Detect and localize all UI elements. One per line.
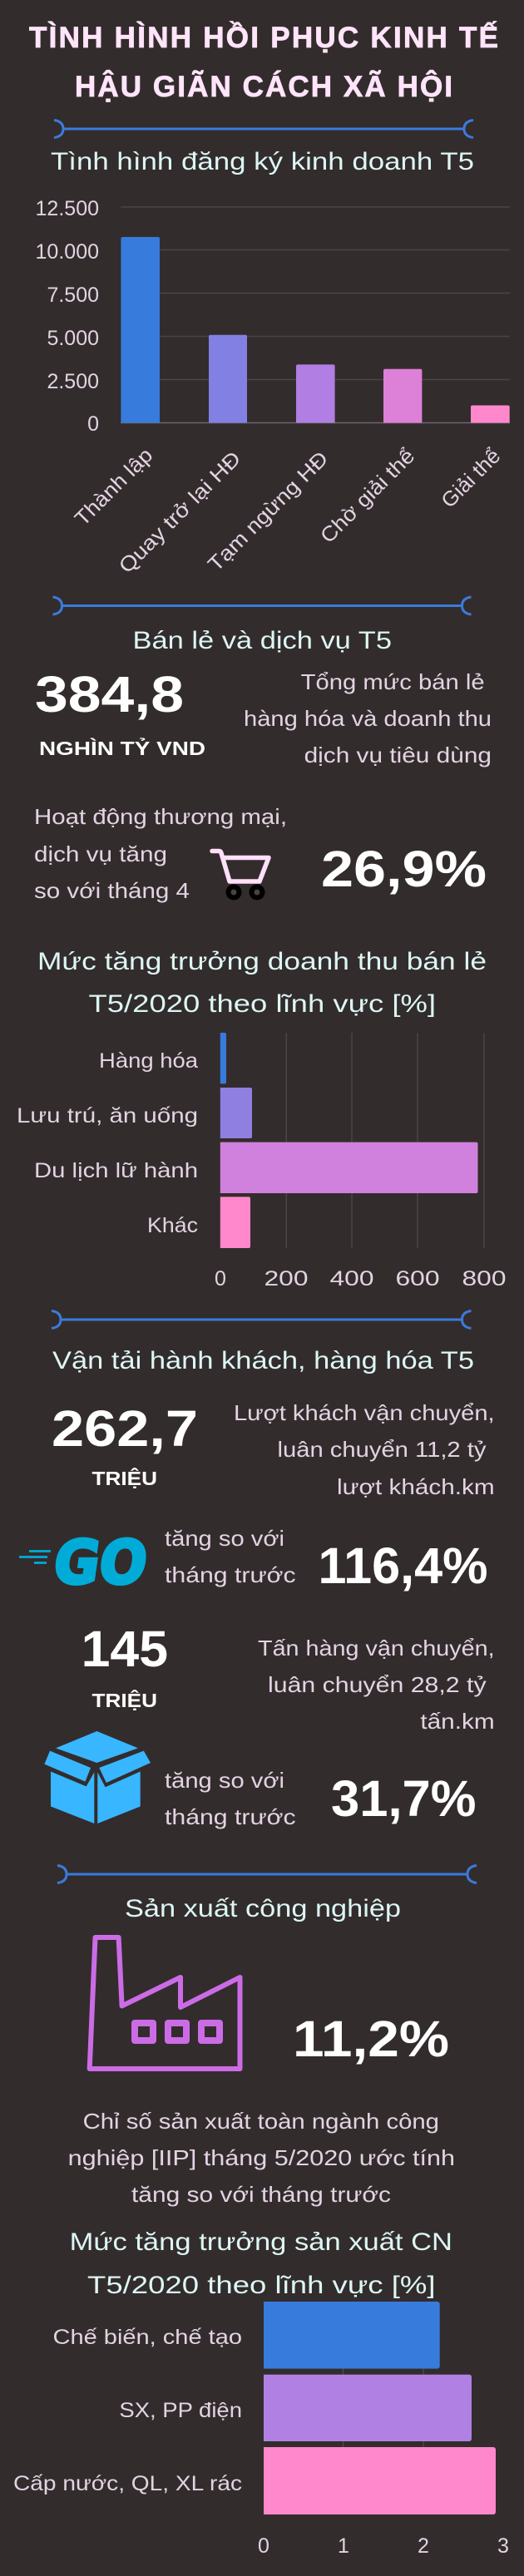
value axis labels: 1 [338,2534,349,2558]
text: passengers description: Lượt khách vận chuyển, [234,1400,495,1425]
stat: 11,2%: 11,2% [293,2011,449,2067]
heading: retail revenue growth [37,948,487,1018]
title [29,21,498,103]
stat: freight: 145 [82,1621,168,1677]
stat: freight [82,1621,168,1711]
heading: business registration: Tình hình đăng ký kinh doanh T5 [51,148,474,175]
text: freight comparison: tháng trước [165,1804,296,1829]
category labels [13,2326,242,2495]
y axis labels: 2.500 [47,370,99,393]
text: passenger comparison: tăng so với [165,1526,284,1551]
section divider: business registration [54,120,473,138]
value axis labels: 0 [215,1267,226,1290]
category labels: Hàng hóa [99,1049,198,1073]
text: passenger comparison [165,1526,296,1587]
section divider: retail [53,597,471,614]
bars [220,1033,477,1248]
text: trade and services increase: so với tháng 4 [34,878,190,903]
icon: factory [90,1937,240,2069]
value axis labels: 600 [396,1267,439,1290]
bars [121,237,510,422]
text: passengers description [234,1400,495,1499]
stat: 116,4%: 116,4% [318,1537,487,1594]
text: freight comparison [165,1768,296,1829]
text: freight description: Tấn hàng vận chuyển, [258,1636,495,1661]
text: trade and services increase: Hoạt động thương mại, [34,804,287,829]
text: passenger comparison: tháng trước [165,1562,296,1587]
text: freight description: tấn.km [420,1709,495,1734]
category labels: Khác [147,1214,198,1237]
x axis labels: Quay trở lại HĐ [115,447,245,578]
stat: total retail value: NGHÌN TỶ VND [39,736,205,759]
text: trade and services increase [34,804,287,903]
text: passengers description: luân chuyển 11,2 tỷ [278,1437,486,1462]
x axis labels: Giải thể [437,444,505,512]
stat: total retail value: 384,8 [35,666,184,723]
value axis labels: 2 [418,2534,429,2558]
stat: passengers: TRIỆU [91,1467,157,1489]
stat: 26,9%: 26,9% [321,841,487,897]
x axis labels: Thành lập [71,443,157,530]
text: total retail description: dịch vụ tiêu dùng [304,743,492,767]
heading: retail and services: Bán lẻ và dịch vụ T5 [133,627,392,654]
stat: passengers: 262,7 [52,1400,198,1457]
y axis labels: 7.500 [47,284,99,307]
heading: transport: Vận tải hành khách, hàng hóa T5 [52,1347,474,1374]
value axis labels: 3 [497,2534,509,2558]
value axis labels: 800 [462,1267,506,1290]
section divider: industry [57,1866,477,1883]
stat: freight: TRIỆU [91,1689,157,1711]
text: IIP description [68,2109,455,2207]
heading: retail revenue growth: Mức tăng trưởng doanh thu bán lẻ [37,948,487,975]
category labels: SX, PP điện [119,2399,242,2422]
heading: industrial growth by sector: T5/2020 theo lĩnh vực [%] [87,2272,436,2299]
category labels: Du lịch lữ hành [34,1159,198,1182]
value axis labels: 200 [264,1267,308,1290]
heading: industrial growth by sector: Mức tăng trưởng sản xuất CN [70,2228,452,2256]
value axis labels [258,2534,509,2558]
category labels [17,1049,198,1237]
y axis labels: 12.500 [36,197,99,220]
text: total retail description: Tổng mức bán lẻ [301,669,485,694]
y axis labels [36,197,99,436]
value axis labels: 400 [329,1267,374,1290]
bar chart: industrial growth by sector [13,2302,509,2558]
heading: industrial production: Sản xuất công nghiệp [125,1895,401,1922]
text: IIP description: nghiệp [IIP] tháng 5/2020 ước tính [68,2145,455,2170]
bar chart: retail revenue growth by sector [17,1033,506,1290]
value axis labels: 0 [258,2534,269,2558]
title: HẬU GIÃN CÁCH XÃ HỘI [75,70,452,103]
text: freight comparison: tăng so với [165,1768,284,1793]
text: trade and services increase: dịch vụ tăng [34,841,167,866]
text: total retail description: hàng hóa và doanh thu [244,706,492,731]
y axis labels: 10.000 [36,240,99,264]
icon: box [44,1731,151,1823]
text: freight description: luân chuyển 28,2 tỷ [268,1672,487,1697]
heading: industrial growth by sector [70,2228,452,2299]
y axis labels: 5.000 [47,327,99,350]
text: freight description [258,1636,495,1734]
stat: 31,7%: 31,7% [331,1770,476,1827]
heading: retail revenue growth: T5/2020 theo lĩnh vực [%] [88,990,436,1018]
x axis labels: Tạm ngừng HĐ [204,447,333,576]
title: TÌNH HÌNH HỒI PHỤC KINH TẾ [29,21,498,54]
stat: total retail value [35,666,205,759]
x axis labels [71,443,505,578]
x axis labels: Chờ giải thể [316,444,419,548]
stat: passengers [52,1400,198,1489]
bar chart: business registration T5 [36,197,510,578]
value axis labels [215,1267,506,1290]
section divider: transport [52,1310,471,1329]
category labels: Lưu trú, ăn uống [17,1104,198,1128]
text: IIP description: tăng so với tháng trước [131,2182,391,2207]
text: passengers description: lượt khách.km [337,1474,495,1499]
icon: shopping cart [212,851,269,900]
bars [264,2302,496,2514]
text: total retail description [244,669,492,767]
text: IIP description: Chỉ số sản xuất toàn ngành công [83,2109,439,2134]
category labels: Cấp nước, QL, XL rác [13,2472,242,2495]
y axis labels: 0 [87,412,99,436]
category labels: Chế biến, chế tạo [53,2326,242,2349]
icon: GO logo: GO [49,1528,151,1598]
